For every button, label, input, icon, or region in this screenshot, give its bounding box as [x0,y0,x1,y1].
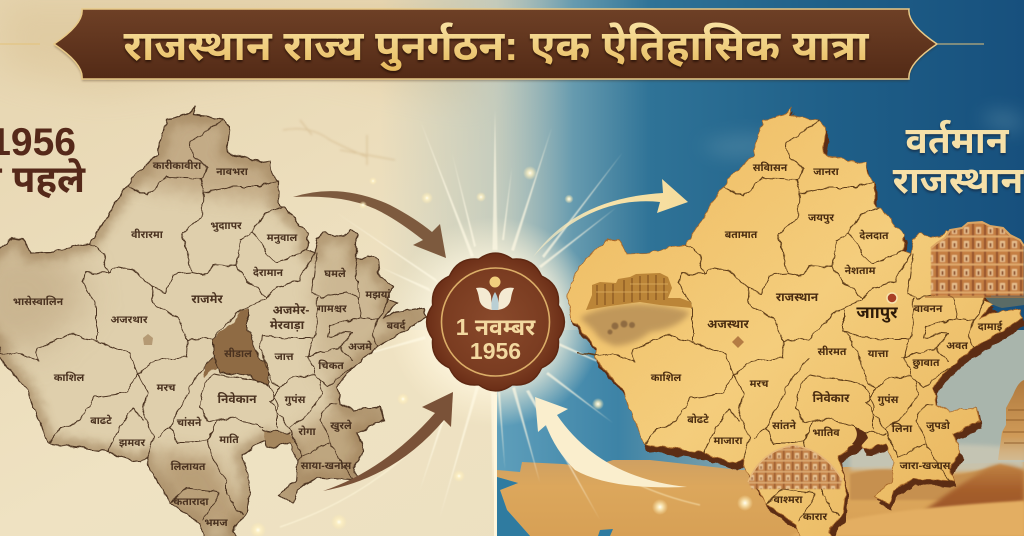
icon: small hawa mahal on map [748,445,842,489]
right map labels: अजस्थार [707,317,750,331]
left map labels: देरामान [253,265,284,279]
right heading: present Rajasthan: वर्तमान [905,119,1010,161]
right map labels [651,161,1003,523]
right map labels: भातिव [812,426,840,439]
fort hill [580,304,690,346]
left map labels: कारीकावीरा [153,159,202,172]
left map labels: चांसने [177,415,202,429]
left map labels: भमज [204,517,228,529]
left map labels: रोगा [298,425,317,438]
left map labels: झमवर [119,437,146,449]
right map labels: वावनन [914,303,943,315]
left map labels: बवर्द [387,319,406,332]
right map labels: देलदात [859,228,889,242]
right map labels: जारा-खजास [900,460,951,472]
right map labels: दामाई [978,320,1003,333]
left map labels: जात्त [274,351,294,363]
right map labels: गुपंस [878,393,899,407]
light rays [280,110,700,527]
sparkles [250,166,753,536]
left map: pre-1956 Rajasthan [0,105,427,536]
right map labels: कारार [803,511,827,523]
right map labels: काशिल [651,371,682,384]
left map labels: अजरथार [110,314,148,326]
right map labels: जयपुर [808,212,834,225]
left map labels: भासेस्वालिन [13,294,64,308]
icon: hill fort [580,273,692,346]
right map labels: बतामात [725,229,758,241]
left map labels: वीरारमा [131,228,164,241]
left map labels: नावभरा [216,166,249,178]
right map labels: जाापुर [856,303,898,323]
left heading: before 1956 [0,121,86,201]
left map labels: निवेकान [217,391,257,406]
right map labels: मरच [750,378,769,390]
left map labels: गुपंस [285,393,306,407]
capital dot [887,293,897,303]
left map labels: काशिल [54,371,85,384]
right map labels: सविासन [753,161,788,174]
right map labels: छुावात [912,357,940,370]
desert dunes [497,444,1024,536]
right map labels: जानरा [813,166,840,178]
left map labels [13,159,406,529]
title text: राजस्थान राज्य पुनर्गठन: एक ऐतिहासिक यात्रा [124,22,869,71]
right map: present-day Rajasthan [567,106,1024,536]
left map labels: मनुवाल [267,232,297,245]
icon: sandstone monument [998,380,1024,460]
right map labels: अवत [946,340,968,352]
right map labels: राजस्थान [776,290,819,304]
right map labels: नेशताम [845,263,876,277]
title banner [0,9,984,81]
right heading: present Rajasthan [893,119,1024,201]
left map labels: सीडाल [224,347,252,360]
right heading: present Rajasthan: राजस्थान [893,160,1024,201]
date seal: 1956 [470,338,521,364]
date seal [427,253,564,391]
left map labels: मझयां [365,288,391,301]
right map labels: निवेकार [813,390,850,405]
left map labels: साया-खनोस [301,459,352,472]
left map labels: अजमेर- [273,302,309,317]
left map labels: चिकत [318,359,344,372]
right map labels: सीरमत [818,345,847,358]
enclave shadow notch [852,428,868,447]
right map labels: यात्ता [868,348,889,360]
left map labels: लिलायत [171,460,206,473]
arrow: bottom-left into seal [323,392,453,491]
fort walls [586,273,692,310]
left map labels: घमले [324,266,346,280]
arrow: top-right out of seal [533,179,688,257]
icon: hawa mahal palace [925,222,1024,308]
right map labels: बोढटे [687,412,709,426]
right map labels: लिना [892,422,913,435]
left map labels: कतारादा [173,496,209,508]
left map labels: माति [219,433,239,446]
left map labels: खुरले [330,418,352,433]
palace shadow notch [985,297,1024,308]
sikal dark district [213,308,268,385]
right map labels: माजारा [714,435,743,447]
left map labels: बाढटे [90,413,112,427]
right map labels: जुपडो [926,419,951,433]
icon: lotus emblem [476,276,514,310]
left map labels: मरच [157,382,176,394]
left map labels: भुदाापर [210,220,242,233]
star marker [143,334,153,345]
right map labels: वाश्मरा [774,494,803,506]
left map labels: मेरवाड़ा [270,317,305,332]
right map labels: सांतने [772,418,796,432]
seal date text: 1 नवम्बर [456,314,536,340]
left map labels: गामश्चर [317,303,347,315]
left map labels: राजमेर [191,291,223,306]
arrow: bottom-right into seal [535,397,687,487]
left map labels: अजमे [348,339,372,353]
arrow: top-left into seal [293,191,446,258]
diamond marker [732,336,744,348]
